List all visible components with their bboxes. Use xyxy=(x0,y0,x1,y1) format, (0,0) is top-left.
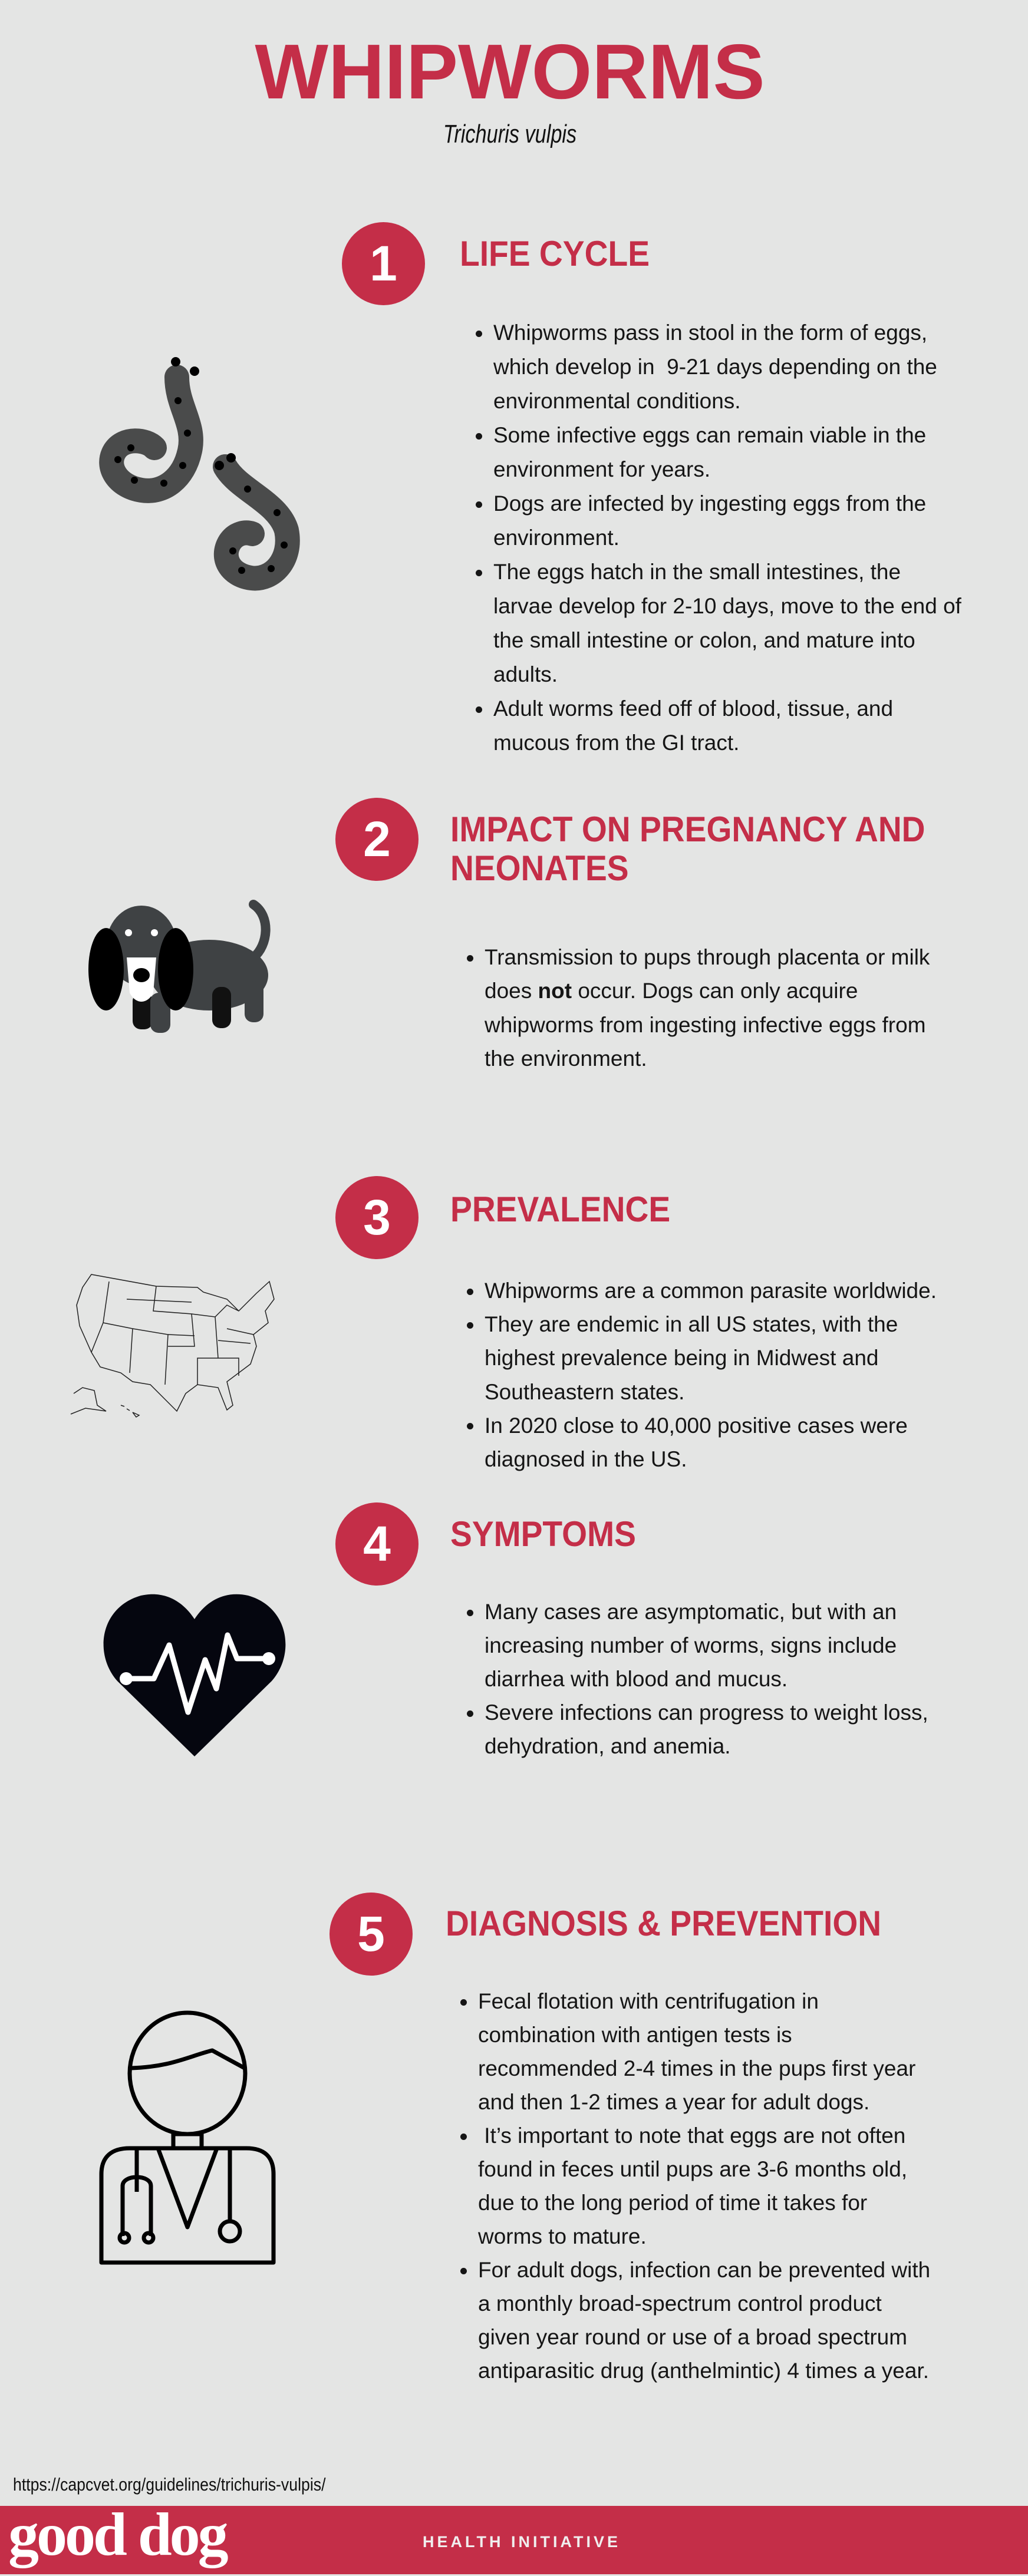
section 5 bullets: a monthly broad-spectrum control product xyxy=(478,2291,882,2316)
section 5 bullets: antiparasitic drug (anthelmintic) 4 times a year. xyxy=(478,2359,929,2383)
subtitle: Trichuris vulpis xyxy=(443,120,576,148)
section 4 bullets: Severe infections can progress to weight loss, xyxy=(485,1700,928,1725)
section 3 number badge: 3 xyxy=(363,1190,391,1245)
section 4 bullets: increasing number of worms, signs include xyxy=(485,1633,897,1657)
section 5 bullets: due to the long period of time it takes for xyxy=(478,2191,867,2215)
section 1 bullets: which develop in 9-21 days depending on the xyxy=(493,355,937,379)
section 2 bullets: Transmission to pups through placenta or milk xyxy=(485,945,930,969)
section 4 bullets xyxy=(467,1600,928,1758)
section 1 bullets: Dogs are infected by ingesting eggs from the xyxy=(493,491,926,516)
section 5 bullets: Fecal flotation with centrifugation in xyxy=(478,1989,819,2013)
section 2 heading: NEONATES xyxy=(450,848,629,888)
section 5 heading: DIAGNOSIS & PREVENTION xyxy=(446,1904,881,1943)
section 5 number badge: 5 xyxy=(357,1906,385,1961)
section 5 bullets: and then 1-2 times a year for adult dogs. xyxy=(478,2090,869,2114)
section 3 bullets xyxy=(467,1279,937,1471)
section 1 bullets: environment. xyxy=(493,526,620,550)
section 5 bullets: worms to mature. xyxy=(478,2224,647,2248)
section 1 bullets: environmental conditions. xyxy=(493,389,741,413)
section 2 number badge xyxy=(335,798,419,881)
icon: doctor xyxy=(99,2010,276,2265)
section 1 bullets: Whipworms pass in stool in the form of eggs, xyxy=(493,321,927,345)
icon: heart with pulse xyxy=(104,1594,285,1756)
section 4 bullets: diarrhea with blood and mucus. xyxy=(485,1667,788,1691)
section 5 bullets: recommended 2-4 times in the pups first year xyxy=(478,2056,915,2080)
section 2 bullets xyxy=(467,945,930,1071)
icon: dachshund dog xyxy=(88,900,271,1033)
section 3 heading: PREVALENCE xyxy=(450,1190,670,1229)
section 2 heading: IMPACT ON PREGNANCY AND xyxy=(450,810,925,849)
section 4 number badge: 4 xyxy=(363,1516,391,1571)
section 2 bullets: whipworms from ingesting infective eggs from xyxy=(485,1013,926,1037)
section 1 bullets: adults. xyxy=(493,662,558,686)
section 2 bullets: does not occur. Dogs can only acquire xyxy=(485,979,858,1003)
section 2 heading xyxy=(450,810,925,888)
section 3 bullets: Whipworms are a common parasite worldwide. xyxy=(485,1279,937,1303)
title: WHIPWORMS xyxy=(255,28,765,115)
source url: https://capcvet.org/guidelines/trichuris-vulpis/ xyxy=(13,2474,325,2495)
icon: worms xyxy=(99,357,300,590)
section 3 bullets: Southeastern states. xyxy=(485,1380,684,1404)
section 5 bullets: combination with antigen tests is xyxy=(478,2023,792,2047)
section 4 heading: SYMPTOMS xyxy=(450,1514,636,1554)
section 3 bullets: They are endemic in all US states, with the xyxy=(485,1312,898,1336)
section 3 bullets: diagnosed in the US. xyxy=(485,1447,687,1471)
section 3 bullets: In 2020 close to 40,000 positive cases were xyxy=(485,1414,908,1438)
health initiative: HEALTH INITIATIVE xyxy=(423,2533,621,2551)
section 2 bullets: the environment. xyxy=(485,1046,647,1071)
section 4 bullets: Many cases are asymptomatic, but with an xyxy=(485,1600,897,1624)
icon: US map xyxy=(71,1274,275,1418)
logo: good dog: good dog xyxy=(8,2501,226,2568)
section 1 heading: LIFE CYCLE xyxy=(460,234,650,273)
section 1 bullets: Adult worms feed off of blood, tissue, and xyxy=(493,696,893,721)
section 1 number badge: 1 xyxy=(370,236,397,291)
section 1 bullets: mucous from the GI tract. xyxy=(493,731,739,755)
section 1 bullets: Some infective eggs can remain viable in the xyxy=(493,423,926,447)
section 4 bullets: dehydration, and anemia. xyxy=(485,1734,731,1758)
section 1 bullets: larvae develop for 2-10 days, move to the end of xyxy=(493,594,961,618)
section 5 bullets: It’s important to note that eggs are not often xyxy=(484,2123,905,2148)
section 5 bullets: found in feces until pups are 3-6 months old, xyxy=(478,2157,907,2181)
section 1 number badge xyxy=(342,222,425,305)
section 5 bullets: For adult dogs, infection can be prevented with xyxy=(478,2258,930,2282)
section 5 bullets: given year round or use of a broad spectrum xyxy=(478,2325,907,2349)
section 1 bullets xyxy=(476,321,961,755)
section 5 bullets xyxy=(460,1989,930,2383)
footer band xyxy=(0,2506,1028,2574)
section 1 bullets: The eggs hatch in the small intestines, the xyxy=(493,560,901,584)
section 1 bullets: the small intestine or colon, and mature into xyxy=(493,628,915,652)
section 5 number badge xyxy=(330,1893,413,1976)
section 2 number badge: 2 xyxy=(363,811,391,867)
section 3 bullets: highest prevalence being in Midwest and xyxy=(485,1346,878,1370)
section 1 bullets: environment for years. xyxy=(493,457,710,481)
section 3 number badge xyxy=(335,1176,419,1259)
section 4 number badge xyxy=(335,1502,419,1586)
